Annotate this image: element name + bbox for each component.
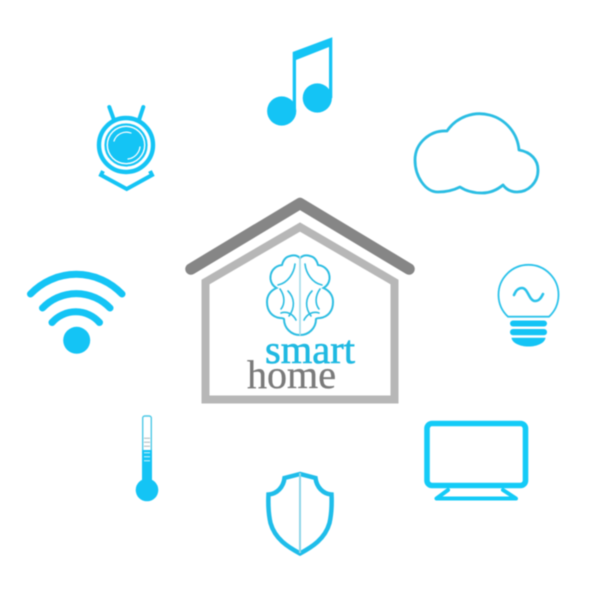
title: smart: smart [265, 327, 355, 372]
house walls [206, 227, 394, 400]
icon: light bulb [499, 265, 559, 346]
roof [191, 204, 409, 269]
icon: wifi [30, 274, 122, 354]
icon: music note [267, 37, 332, 126]
icon: thermometer [136, 416, 158, 501]
icon: camera [99, 107, 153, 189]
title: home: home [247, 352, 336, 397]
icon: monitor [427, 424, 526, 498]
icon: shield [268, 473, 332, 554]
house [191, 204, 409, 400]
icon: cloud [415, 114, 538, 193]
icon: brain [267, 255, 333, 335]
